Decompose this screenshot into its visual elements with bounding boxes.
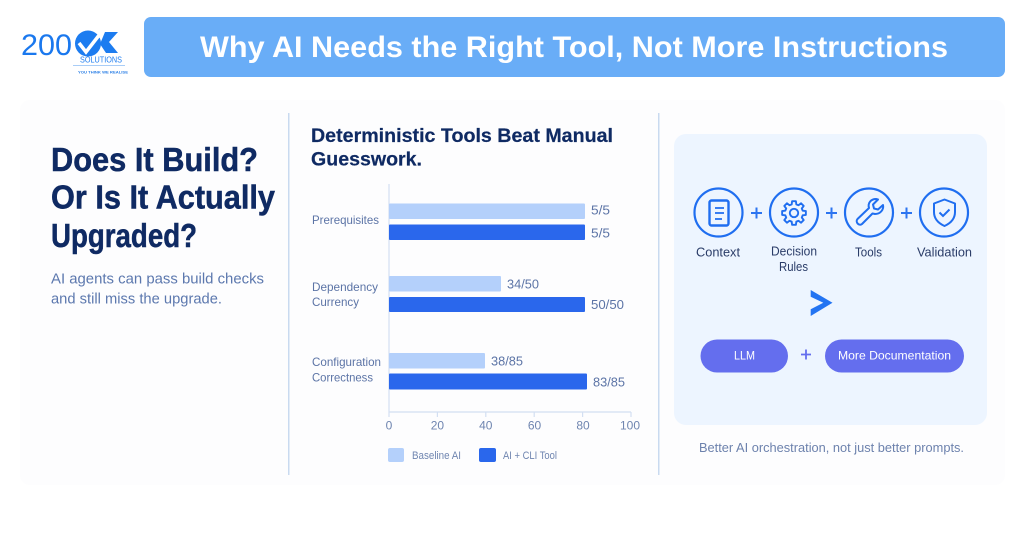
logo: YOU THINK WE REALISE	[78, 70, 128, 74]
formula labels: Tools	[855, 246, 882, 260]
chart heading: Deterministic Tools Beat Manual	[311, 125, 613, 147]
panel: bar chart	[311, 125, 640, 462]
group: configuration correctness: Correctness	[312, 370, 373, 384]
group: dependency currency: Dependency	[312, 280, 378, 294]
panel: question heading	[51, 141, 276, 308]
pill: more documentation: More Documentation	[838, 348, 951, 362]
pill: LLM	[700, 340, 788, 372]
logo	[21, 29, 128, 74]
formula labels: Validation	[917, 246, 972, 260]
chart axes	[386, 184, 640, 432]
group: prerequisites: Prerequisites	[312, 213, 379, 227]
group: configuration correctness: 38/85	[491, 354, 523, 368]
caption: Better AI orchestration, not just better prompts.	[699, 441, 964, 455]
heading: Does It Build?	[51, 141, 258, 178]
formula labels: Rules	[779, 260, 808, 274]
legend	[388, 448, 557, 462]
logo: 200	[21, 29, 72, 62]
chart axes: 20	[431, 418, 444, 432]
group: dependency currency: Currency	[312, 295, 359, 309]
legend: Baseline AI	[412, 450, 461, 462]
title banner: Why AI Needs the Right Tool, Not More Instructions	[200, 31, 948, 64]
chart axes: 80	[576, 418, 590, 432]
group: prerequisites: 5/5	[591, 202, 610, 218]
group: configuration correctness: 83/85	[593, 374, 625, 390]
heading	[51, 141, 276, 254]
formula labels: Context	[696, 246, 741, 260]
chart axes: 0	[386, 418, 393, 432]
pill: more documentation	[825, 340, 964, 372]
heading: Upgraded?	[51, 217, 197, 254]
group: prerequisites	[312, 202, 610, 240]
group: prerequisites: 5/5	[591, 226, 610, 240]
group: dependency currency: 50/50	[591, 297, 624, 312]
plus sign	[801, 350, 811, 360]
subtext: and still miss the upgrade.	[51, 292, 222, 308]
icon: greater-than arrow	[811, 290, 832, 316]
chart axes: 100	[620, 418, 640, 432]
pill: LLM: LLM	[734, 348, 755, 362]
chart axes: 60	[528, 418, 541, 432]
group: configuration correctness	[312, 353, 625, 390]
title banner	[144, 17, 1005, 77]
group: dependency currency	[312, 276, 624, 312]
legend: AI + CLI Tool	[503, 450, 557, 462]
chart axes: 40	[479, 418, 493, 432]
group: dependency currency: 34/50	[507, 276, 539, 292]
heading: Or Is It Actually	[51, 178, 276, 216]
icon: tools wrench	[845, 188, 893, 236]
logo: SOLUTIONS	[80, 54, 122, 64]
chart heading	[311, 125, 613, 170]
group: configuration correctness: Configuration	[312, 355, 381, 369]
content panel background	[20, 100, 1005, 485]
icon: validation shield	[920, 188, 968, 236]
icon: decision rules gear	[770, 188, 818, 236]
subtext: AI agents can pass build checks	[51, 272, 264, 288]
panel: orchestration formula	[674, 134, 987, 425]
chart heading: Guesswork.	[311, 148, 422, 170]
formula labels: Decision	[771, 244, 817, 258]
icon: context document	[694, 188, 742, 236]
formula labels	[696, 244, 972, 274]
plus signs	[751, 208, 912, 218]
subtext	[51, 272, 264, 308]
